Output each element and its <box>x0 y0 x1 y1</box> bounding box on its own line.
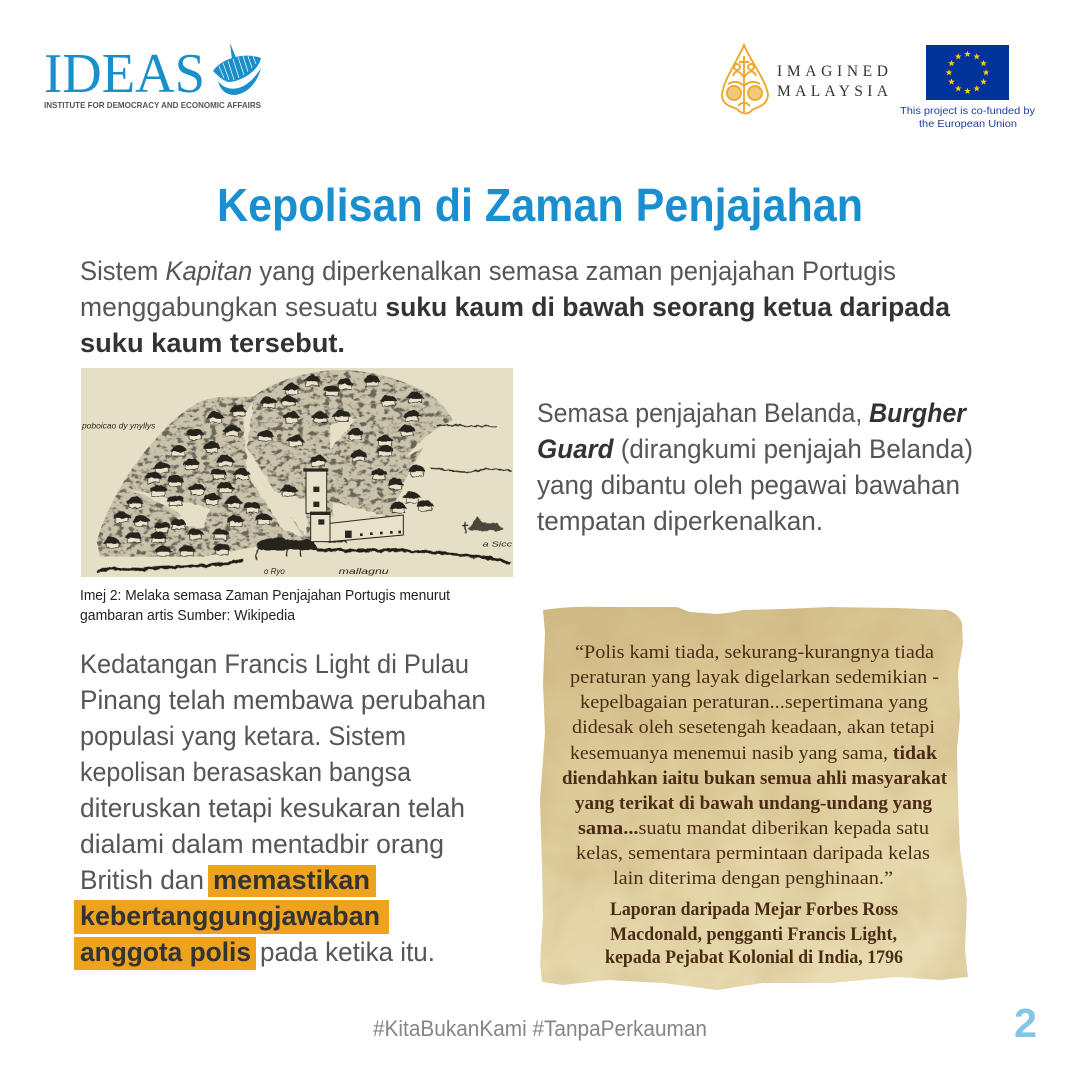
quote attribution <box>605 899 903 968</box>
image caption: Imej 2: Melaka semasa Zaman Penjajahan Portugis menurut <box>80 588 450 604</box>
hill mass <box>97 370 453 557</box>
quote text: yang terikat di bawah undang-undang yang <box>575 793 932 814</box>
text block: Kapitan system: menggabungkan sesuatu suku kaum di bawah seorang ketua daripada <box>80 292 951 322</box>
text block: Francis Light: populasi yang ketara. Sistem <box>80 721 406 751</box>
logo: IDEAS: INSTITUTE FOR DEMOCRACY AND ECONOMIC AFFAIRS <box>44 100 261 110</box>
page number: 2 <box>1014 1000 1037 1046</box>
text block: Francis Light: dialami dalam mentadbir orang <box>80 829 444 859</box>
quote attribution: kepada Pejabat Kolonial di India, 1796 <box>605 947 903 968</box>
highlight bars <box>74 865 389 970</box>
logo: IDEAS: IDEAS <box>44 43 205 105</box>
quote text: peraturan yang layak digelarkan sedemikian - <box>570 667 939 688</box>
text block: Kapitan system: Sistem Kapitan yang diperkenalkan semasa zaman penjajahan Portugis <box>80 256 896 286</box>
logo: Imagined Malaysia: IMAGINED <box>777 63 888 80</box>
quote text <box>562 642 948 889</box>
fort tower and wall <box>303 468 403 542</box>
quote text: “Polis kami tiada, sekurang-kurangnya tiada <box>575 642 935 663</box>
quote text: sama...suatu mandat diberikan kepada satu <box>578 818 930 839</box>
quote attribution: Laporan daripada Mejar Forbes Ross <box>610 899 898 920</box>
logo: EU flag: the European Union <box>919 118 1017 130</box>
text block: Francis Light: diteruskan tetapi kesukaran telah <box>80 793 465 823</box>
quote text: kelas, sementara permintaan daripada kelas <box>576 843 930 864</box>
map labels: mallagnu <box>339 567 390 576</box>
quote text: diendahkan iaitu bukan semua ahli masyarakat <box>562 768 948 789</box>
image: sketch of Melaka <box>81 368 513 577</box>
title: Kepolisan di Zaman Penjajahan <box>217 179 863 231</box>
text block: Kapitan system <box>80 256 951 358</box>
text block: Francis Light: Pinang telah membawa perubahan <box>80 685 486 715</box>
text block: Burgher Guard: yang dibantu oleh pegawai bawahan <box>537 470 960 500</box>
quote text: kepelbagaian peraturan...sepertimana yang <box>580 692 929 713</box>
text block: Francis Light: British dan <box>80 865 204 895</box>
text block: Burgher Guard <box>537 398 973 536</box>
text block: Francis Light: kepolisan berasaskan bangsa <box>80 757 412 787</box>
text block: Francis Light: memastikan <box>213 865 370 895</box>
quote attribution: Macdonald, pengganti Francis Light, <box>610 924 897 945</box>
icon: IDEAS bird <box>213 43 261 95</box>
text block: Kapitan system: suku kaum tersebut. <box>80 328 345 358</box>
text block: Burgher Guard: Guard (dirangkumi penjajah Belanda) <box>537 434 973 464</box>
logo: EU flag: This project is co-funded by <box>900 105 1036 117</box>
map labels: a Sicc <box>483 540 512 549</box>
quote text: lain diterima dengan penghinaan.” <box>613 868 893 889</box>
text block: Francis Light: kebertanggungjawaban <box>80 901 380 931</box>
icon: wayang <box>722 45 768 113</box>
map labels: poboicao dy ynyllys <box>81 421 155 430</box>
map labels: o Ryo <box>264 567 285 576</box>
footer hashtags: #KitaBukanKami #TanpaPerkauman <box>373 1016 707 1041</box>
panel: parchment quote <box>540 607 968 990</box>
image caption: gambaran artis Sumber: Wikipedia <box>80 608 296 624</box>
image caption <box>80 588 450 624</box>
logo: Imagined Malaysia: MALAYSIA <box>777 83 889 100</box>
text block: Francis Light <box>74 649 486 970</box>
text block: Francis Light: anggota polis <box>80 937 251 967</box>
logo: EU flag <box>900 45 1036 130</box>
quote text: kesemuanya menemui nasib yang sama, tidak <box>570 743 937 764</box>
map labels <box>81 421 512 576</box>
text block: Burgher Guard: tempatan diperkenalkan. <box>537 506 823 536</box>
text block: Burgher Guard: Semasa penjajahan Belanda, Burgher <box>537 398 967 428</box>
logo: Imagined Malaysia <box>722 45 889 113</box>
text block: Francis Light: Kedatangan Francis Light di Pulau <box>80 649 469 679</box>
quote text: didesak oleh sesetengah keadaan, akan tetapi <box>572 717 935 738</box>
text block: Francis Light: pada ketika itu. <box>260 937 435 967</box>
